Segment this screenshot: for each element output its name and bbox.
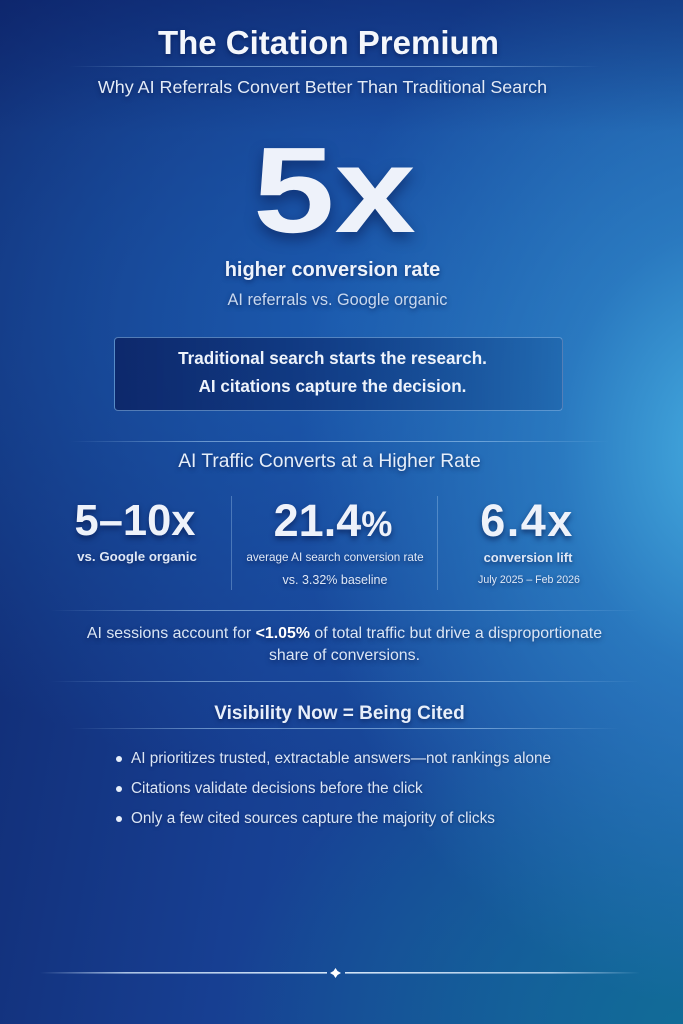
stat: 21.4%: 21.4% [274,495,392,546]
stat: 5-10x [74,497,197,566]
callout [114,337,563,411]
callout: AI citations capture the decision. [199,377,466,396]
traffic note: share of conversions. [269,647,420,664]
callout: Traditional search starts the research. [178,349,487,368]
stat: 6.4x: July 2025 – Feb 2026 [478,574,580,586]
stat: 5-10x: vs. Google organic [77,549,197,564]
stat: 6.4x: conversion lift [484,550,572,565]
stat: 21.4%: average AI search conversion rate [246,551,424,564]
bullet item 2: Citations validate decisions before the click [131,780,423,797]
stat: 6.4x: 6.4x [480,495,574,546]
hero statistic: 5x [253,122,416,258]
section heading: visibility: Visibility Now = Being Cited [214,703,465,724]
traffic note [87,625,602,664]
stat: 6.4x [478,495,580,588]
hero sublabel: AI referrals vs. Google organic [228,291,447,309]
stat: 21.4%: vs. 3.32% baseline [283,573,387,587]
traffic note: AI sessions account for <1.05% of total traffic but drive a disproportionate [87,625,602,642]
bullet item 1: AI prioritizes trusted, extractable answers—not rankings alone [131,750,551,767]
hero label: higher conversion rate [225,259,440,281]
section heading: traffic: AI Traffic Converts at a Higher Rate [178,451,481,472]
footer divider [44,968,635,978]
stats row [74,495,580,590]
stat: 5-10x: 5–10x [75,497,195,545]
subtitle: Why AI Referrals Convert Better Than Traditional Search [98,77,547,97]
title: The Citation Premium [158,24,499,61]
bullet item 3: Only a few cited sources capture the majority of clicks [131,810,495,827]
bullet list [116,750,552,828]
stat: 21.4% [246,495,424,588]
